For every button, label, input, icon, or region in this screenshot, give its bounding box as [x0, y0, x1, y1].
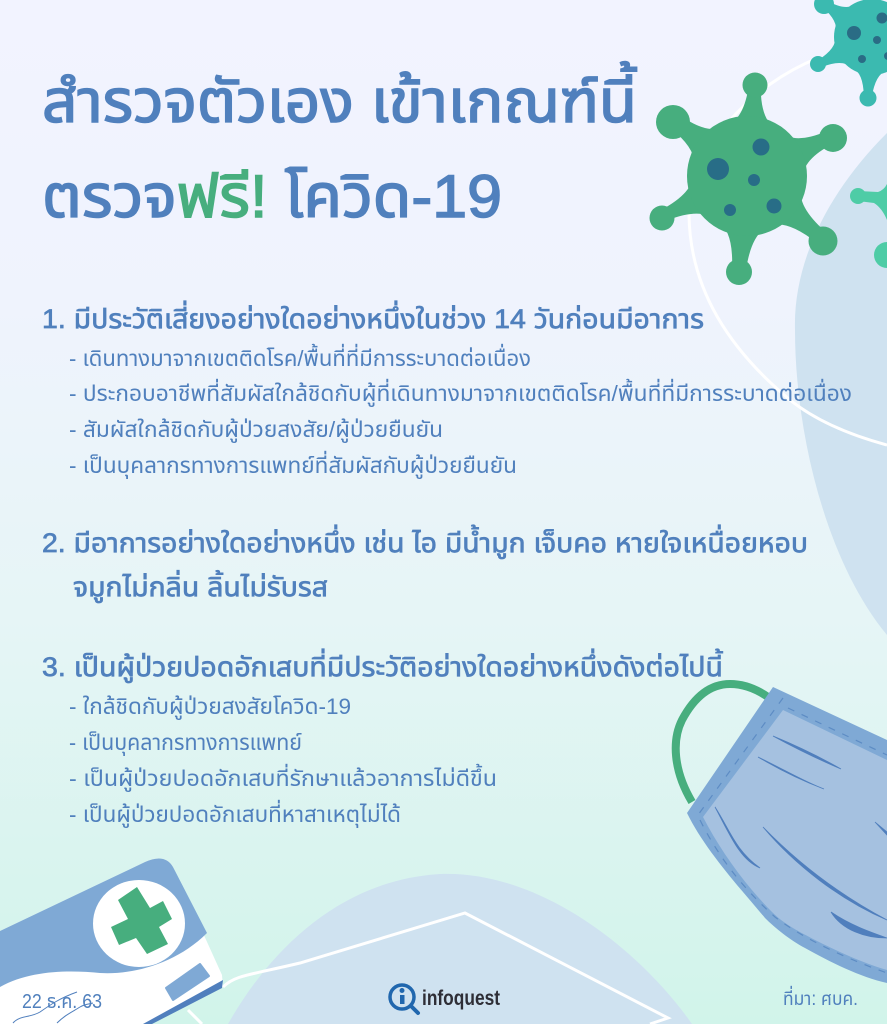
logo: infoquest: infoquest	[422, 987, 500, 1010]
white outline: lower mask	[188, 913, 668, 1024]
mask folds	[715, 736, 887, 938]
criterion 2: 2. มีอาการอย่างใดอย่างหนึ่ง เช่น ไอ มีน้ำมูก เจ็บคอ หายใจเหนื่อยหอบ	[42, 524, 808, 559]
white outline: upper mask	[689, 58, 887, 445]
criterion 1: - เดินทางมาจากเขตติดโรค/พื้นที่ที่มีการระบาดต่อเนื่อง	[69, 343, 531, 371]
signature squiggles	[13, 992, 93, 1023]
icon: medical card	[0, 858, 223, 1024]
criterion 3	[42, 648, 723, 828]
globe shape: right	[795, 133, 887, 635]
criterion 1: - สัมผัสใกล้ชิดกับผู้ป่วยสงสัย/ผู้ป่วยยืนยัน	[69, 417, 443, 443]
globe shape: bottom	[228, 874, 692, 1024]
criterion 3: - เป็นผู้ป่วยปอดอักเสบที่รักษาแล้วอาการไม่ดีขึ้น	[69, 763, 497, 792]
icon: mint virus	[850, 184, 887, 268]
criterion 3: - เป็นบุคลากรทางการแพทย์	[69, 730, 302, 756]
date: 22 ธ.ค. 63	[22, 991, 102, 1013]
criterion 2: จมูกไม่กลิ่น ลิ้นไม่รับรส	[73, 570, 328, 603]
criterion 3: - ใกล้ชิดกับผู้ป่วยสงสัยโควิด-19	[69, 694, 351, 720]
criterion 1	[42, 300, 852, 479]
source: ที่มา: ศบค.	[783, 985, 858, 1010]
icon: green virus	[650, 72, 847, 285]
icon: face mask	[676, 684, 887, 983]
criterion 1: 1. มีประวัติเสี่ยงอย่างใดอย่างหนึ่งในช่วง 14 วันก่อนมีอาการ	[42, 300, 704, 334]
icon: green cross	[111, 887, 172, 954]
criterion 1: - ประกอบอาชีพที่สัมผัสใกล้ชิดกับผู้ที่เดินทางมาจากเขตติดโรค/พื้นที่ที่มีการระบาดต่อเนื่อง	[69, 378, 852, 407]
criterion 3: 3. เป็นผู้ป่วยปอดอักเสบที่มีประวัติอย่างใดอย่างหนึ่งดังต่อไปนี้	[42, 648, 723, 683]
criterion 1: - เป็นบุคลากรทางการแพทย์ที่สัมผัสกับผู้ป่วยยืนยัน	[69, 450, 517, 479]
icon: teal virus	[810, 0, 887, 106]
title: ตรวจฟรี! โควิด-19	[42, 163, 502, 230]
mask stitching	[698, 698, 887, 973]
criterion 2	[42, 524, 808, 603]
criterion 3: - เป็นผู้ป่วยปอดอักเสบที่หาสาเหตุไม่ได้	[69, 799, 401, 828]
card pill	[166, 964, 209, 1000]
title: สำรวจตัวเอง เข้าเกณฑ์นี้	[42, 61, 637, 135]
logo: infoquest	[390, 985, 500, 1013]
mask body	[687, 687, 887, 983]
mask strap	[676, 684, 768, 802]
card circle	[93, 880, 185, 967]
title	[42, 61, 637, 230]
